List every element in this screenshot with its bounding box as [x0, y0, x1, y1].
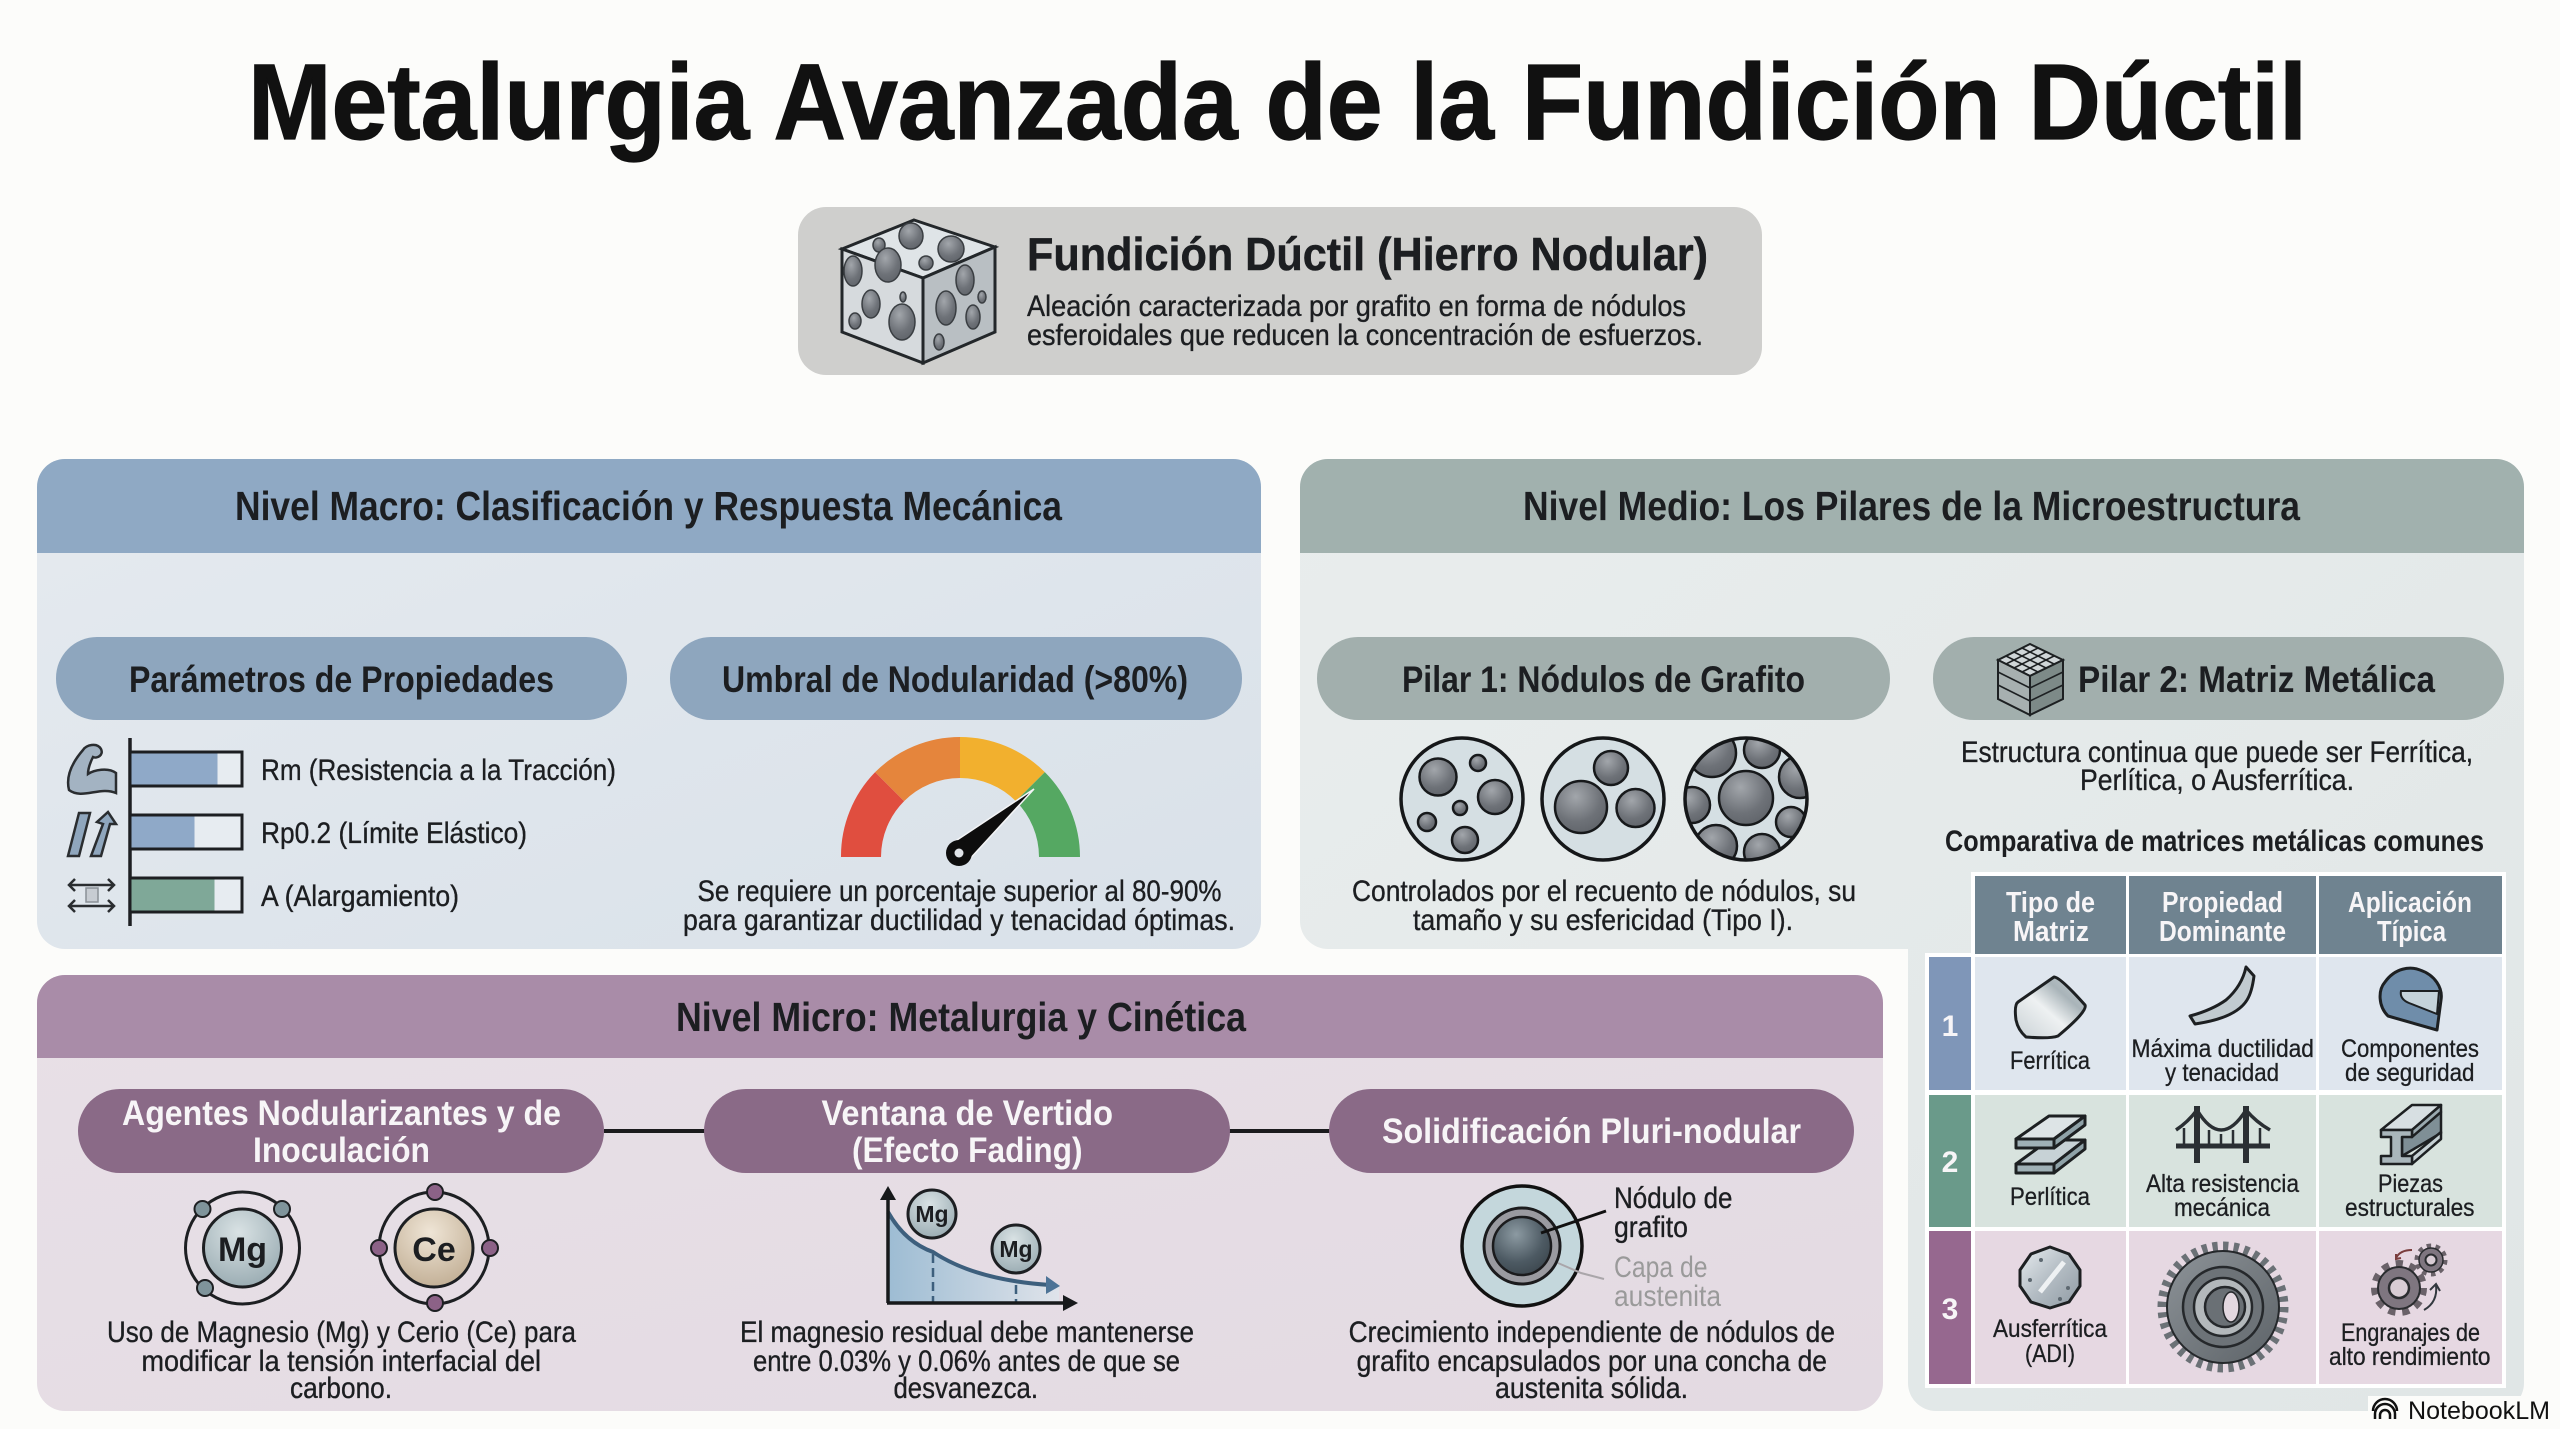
pill: Pilar 1	[1317, 637, 1890, 720]
pill: Ventana de Vertido	[704, 1089, 1230, 1173]
marker: Mg low	[992, 1225, 1040, 1273]
table row 2: Perlítica: Alta resistencia	[2146, 1170, 2299, 1198]
gauge caption: Se requiere un porcentaje superior al 80-90%	[698, 875, 1222, 908]
table row 3: Ausferrítica: alto rendimiento	[2329, 1343, 2490, 1371]
table header: Dominante	[2159, 916, 2286, 948]
bar: Rp0.2: Rp0.2 (Límite Elástico)	[261, 817, 527, 850]
marker: Mg low: Mg	[999, 1236, 1033, 1262]
pilar 2 description	[1961, 736, 2473, 797]
panel header: macro: Nivel Macro: Clasificación y Respuesta Mecánica	[235, 483, 1063, 529]
icon: elongation arrows	[69, 879, 114, 912]
bar: Rm	[130, 752, 616, 787]
table row 2: Perlítica	[1929, 1095, 2502, 1227]
bar: Rp0.2	[130, 815, 527, 850]
pill: Pilar 2	[1933, 637, 2504, 720]
pill: Agentes Nodularizantes: Inoculación	[253, 1131, 430, 1170]
caption: ventana: El magnesio residual debe mantenerse	[740, 1316, 1194, 1349]
table row 3: Ausferrítica: Engranajes de	[2341, 1319, 2480, 1347]
pill: Parámetros de Propiedades	[56, 637, 627, 720]
table row 1: Ferrítica	[1929, 957, 2502, 1090]
pilar 2 description: Perlítica, o Ausferrítica.	[2080, 764, 2354, 797]
axis	[128, 738, 132, 926]
caption: agentes: modificar la tensión interfacial del	[142, 1345, 541, 1378]
gauge caption: para garantizar ductilidad y tenacidad óptimas.	[683, 904, 1235, 937]
bar chart: properties	[68, 738, 616, 926]
pill: Ventana de Vertido: Ventana de Vertido	[822, 1094, 1113, 1133]
pilar 2 description: Estructura continua que puede ser Ferrítica,	[1961, 736, 2473, 769]
table header: Propiedad	[2162, 887, 2283, 919]
panel header: medio: Nivel Medio: Los Pilares de la Microestructura	[1523, 483, 2301, 529]
caption: agentes: Uso de Magnesio (Mg) y Cerio (Ce) para	[107, 1316, 576, 1349]
table header: Matriz	[2013, 916, 2089, 948]
icon: ausferritic disc	[2020, 1247, 2080, 1308]
pill: Agentes Nodularizantes: Agentes Nodularizantes y de	[122, 1094, 561, 1133]
bar: Rm: Rm (Resistencia a la Tracción)	[261, 754, 616, 787]
label: Capa de austenita: Capa de	[1614, 1251, 1708, 1284]
icon: pearlite plates	[2016, 1116, 2085, 1173]
pill: Umbral de Nodularidad: Umbral de Nodularidad (>80%)	[722, 659, 1188, 700]
table row 3: Ausferrítica: 3	[1942, 1293, 1958, 1326]
panel header: micro: Nivel Micro: Metalurgia y Cinética	[676, 994, 1247, 1040]
caption: agentes	[107, 1316, 576, 1405]
table row 2: Perlítica: estructurales	[2345, 1194, 2474, 1222]
table row 1: Ferrítica: Ferrítica	[2010, 1047, 2090, 1075]
table row 2: Perlítica: Perlítica	[2010, 1183, 2090, 1211]
panel: Nivel Micro	[37, 975, 1883, 1411]
caption: solidificación	[1349, 1316, 1835, 1405]
caption: solidificación: grafito encapsulados por una concha de	[1357, 1345, 1827, 1378]
icon: metallic matrix cube	[1998, 644, 2063, 715]
panel header: micro	[37, 975, 1883, 1058]
caption: ventana: desvanezca.	[894, 1372, 1038, 1405]
pill: Ventana de Vertido: (Efecto Fading)	[852, 1131, 1082, 1170]
label: Nódulo de grafito: grafito	[1614, 1211, 1688, 1244]
pill: Umbral de Nodularidad	[670, 637, 1242, 720]
needle	[946, 789, 1034, 866]
title: Metalurgia Avanzada de la Fundición Dúctil	[248, 41, 2307, 162]
heading: Fundición Dúctil (Hierro Nodular)	[1027, 228, 1708, 280]
table row 3: Ausferrítica: Ausferrítica	[1993, 1315, 2107, 1343]
table row 1: Ferrítica: 1	[1942, 1010, 1958, 1043]
panel: Nivel Medio	[1300, 459, 2524, 1411]
description: Aleación caracterizada por grafito en forma de nódulos	[1027, 290, 1686, 323]
pill: Pilar 2: Pilar 2: Matriz Metálica	[2078, 659, 2435, 700]
table header	[1975, 876, 2502, 954]
table row 1: Ferrítica: de seguridad	[2345, 1059, 2474, 1087]
icon: nodular iron cube	[842, 220, 995, 363]
icon: small gears	[2375, 1246, 2445, 1312]
icon: ferritic ingot	[2015, 977, 2085, 1038]
gauge: nodularity	[841, 737, 1080, 866]
pill: Pilar 1: Pilar 1: Nódulos de Grafito	[1402, 659, 1805, 700]
icon: Ce atom	[371, 1184, 498, 1311]
panel header: medio	[1300, 459, 2524, 553]
caption: solidificación: Crecimiento independiente de nódulos de	[1349, 1316, 1835, 1349]
pill: Agentes Nodularizantes	[78, 1089, 604, 1173]
icon: Ce atom: Ce	[412, 1231, 456, 1269]
table row 1: Ferrítica: y tenacidad	[2165, 1059, 2279, 1087]
caption: agentes: carbono.	[290, 1372, 392, 1405]
table row 1: Ferrítica: Componentes	[2341, 1035, 2479, 1063]
sample 2	[1542, 738, 1664, 860]
icon: suspension bridge	[2176, 1106, 2270, 1163]
pilar 1 caption: Controlados por el recuento de nódulos, su	[1352, 875, 1856, 908]
chart: magnesium fading curve	[880, 1186, 1078, 1311]
watermark: NotebookLM: NotebookLM	[2408, 1397, 2550, 1425]
table row 2: Perlítica: Piezas	[2378, 1170, 2443, 1198]
table header: Aplicación	[2348, 887, 2472, 919]
label: Nódulo de grafito	[1614, 1182, 1732, 1244]
label: Nódulo de grafito: Nódulo de	[1614, 1182, 1732, 1215]
pill: Solidificación Pluri-nodular: Solidificación Pluri-nodular	[1382, 1112, 1801, 1151]
table row 3: Ausferrítica	[1929, 1231, 2502, 1384]
table row 3: Ausferrítica: (ADI)	[2025, 1340, 2075, 1368]
bar: A	[130, 878, 459, 913]
sample 3	[1683, 736, 1809, 862]
gauge caption	[683, 875, 1235, 937]
pill: Parámetros de Propiedades: Parámetros de Propiedades	[129, 659, 554, 700]
icon: graphite nodule samples	[1399, 736, 1809, 862]
icon: muscle	[68, 745, 116, 794]
label: Capa de austenita	[1614, 1251, 1721, 1313]
caption: solidificación: austenita sólida.	[1495, 1372, 1688, 1405]
sample 1	[1401, 738, 1523, 860]
table row 2: Perlítica: 2	[1942, 1146, 1958, 1179]
panel: Nivel Macro	[37, 459, 1261, 949]
watermark: NotebookLM	[2368, 1396, 2560, 1429]
icon: I-beam	[2381, 1105, 2441, 1164]
bar: A: A (Alargamiento)	[261, 880, 459, 913]
table: matrix comparison	[1925, 872, 2506, 1388]
icon: Mg atom: Mg	[218, 1231, 267, 1269]
connectors between stages	[604, 1129, 1331, 1133]
icon: yield arrows	[68, 812, 116, 856]
marker: Mg high: Mg	[915, 1201, 949, 1227]
definition card: Fundición Dúctil	[798, 207, 1762, 375]
table header: Tipo de	[2006, 887, 2095, 919]
description: esferoidales que reducen la concentración de esfuerzos.	[1027, 319, 1703, 352]
caption: ventana	[740, 1316, 1194, 1405]
table row 2: Perlítica: mecánica	[2174, 1194, 2270, 1222]
table header: Típica	[2377, 916, 2447, 948]
pilar 1 caption	[1352, 875, 1856, 937]
diagram: nodule in austenite shell	[1462, 1182, 1732, 1313]
icon: bent strip	[2190, 967, 2254, 1024]
icon: Mg atom	[186, 1192, 300, 1304]
table row 1: Ferrítica: Máxima ductilidad	[2132, 1035, 2314, 1063]
icon: helmet	[2380, 968, 2441, 1030]
pilar 1 caption: tamaño y su esfericidad (Tipo I).	[1413, 904, 1793, 937]
panel header: macro	[37, 459, 1261, 553]
pill: Solidificación Pluri-nodular	[1329, 1089, 1854, 1173]
caption: ventana: entre 0.03% y 0.06% antes de que se	[753, 1345, 1180, 1378]
label: Capa de austenita: austenita	[1614, 1280, 1721, 1313]
icon: large gear	[2163, 1247, 2283, 1367]
description	[1027, 290, 1703, 352]
marker: Mg high	[908, 1190, 956, 1238]
